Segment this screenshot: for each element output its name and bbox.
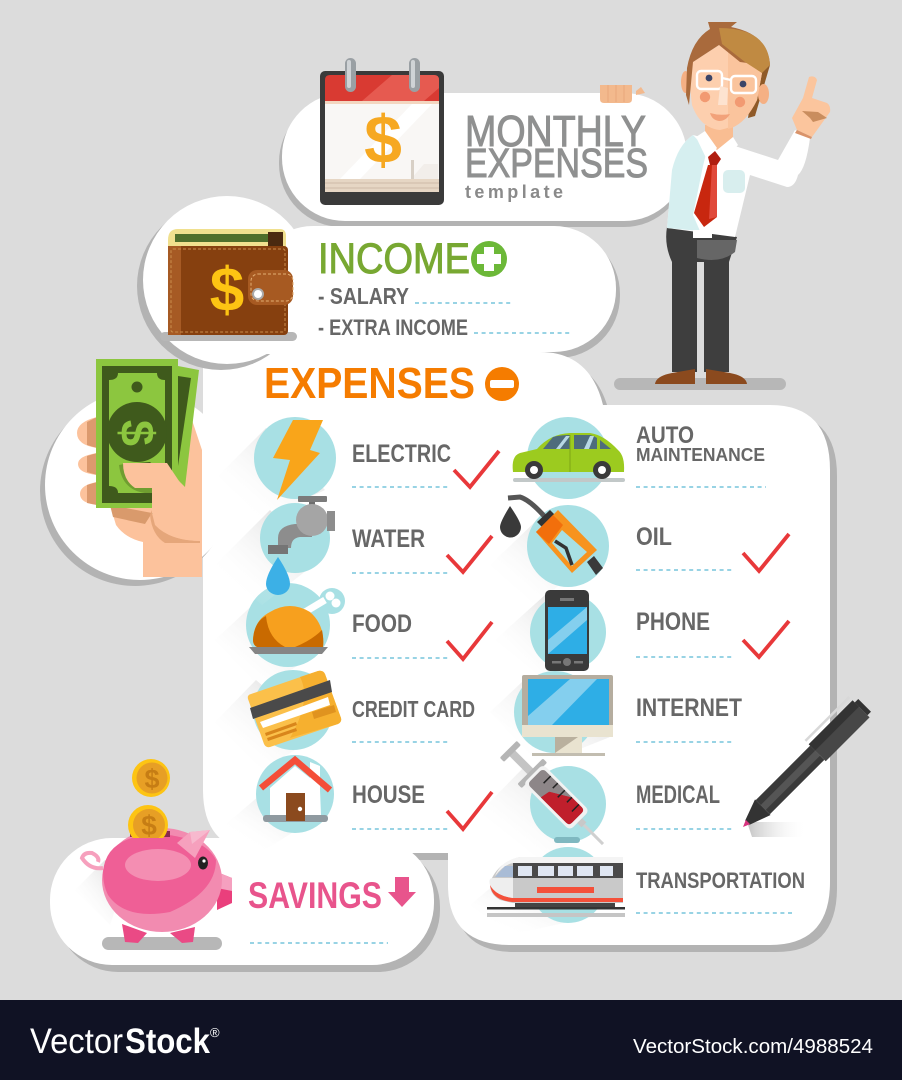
row: electric: ELECTRIC — [352, 440, 451, 468]
row: credit card: CREDIT CARD — [352, 696, 475, 722]
title — [465, 107, 648, 202]
footer bar — [0, 1000, 902, 1080]
savings heading — [248, 875, 416, 943]
income list — [318, 283, 572, 340]
row: electric — [218, 417, 499, 520]
icon: piggy bank with coins — [75, 759, 232, 950]
footer bar: ® — [210, 1025, 220, 1040]
panel: hand circle — [40, 390, 235, 586]
footer bar: Stock — [125, 1022, 210, 1061]
row: water — [215, 496, 492, 605]
panel: income pill shadow — [255, 232, 620, 358]
icon: businessman — [600, 22, 830, 390]
footer bar: VectorStock.com/4988524 — [633, 1036, 873, 1058]
panel: title pill — [279, 93, 687, 227]
row: auto maintenance: AUTO — [636, 422, 694, 449]
title: template — [465, 182, 563, 202]
title: EXPENSES — [465, 140, 648, 186]
row: internet — [490, 671, 742, 765]
row: food — [215, 583, 492, 690]
row: auto maintenance — [513, 417, 766, 499]
row: auto maintenance: MAINTENANCE — [636, 445, 765, 465]
footer bar: Vector — [30, 1022, 123, 1061]
icon: piggy bank with coins: $ — [141, 810, 157, 841]
icon: wallet — [160, 229, 297, 341]
icon: wallet: $ — [210, 256, 244, 325]
row: phone: PHONE — [636, 608, 710, 636]
row: oil — [490, 497, 789, 605]
icon: calendar: $ — [364, 102, 402, 178]
icon: piggy bank with coins: $ — [144, 764, 160, 794]
icon: hand with money — [77, 359, 202, 577]
row: house: HOUSE — [352, 781, 425, 809]
row: house — [225, 755, 492, 850]
icon: pen — [730, 693, 873, 837]
savings heading: SAVINGS — [248, 875, 382, 916]
income heading: INCOME — [318, 235, 470, 283]
row: medical — [480, 737, 732, 860]
panel: savings pill — [50, 838, 440, 972]
row: food: FOOD — [352, 610, 412, 638]
row: transportation: TRANSPORTATION — [636, 868, 805, 893]
income list: - SALARY — [318, 283, 409, 309]
row: credit card — [215, 670, 475, 770]
icon: hand with money: $ — [111, 420, 164, 446]
panel: income pill with wallet circle — [137, 196, 616, 370]
row: internet: INTERNET — [636, 694, 742, 722]
row: phone — [495, 590, 789, 680]
panel: expenses main card — [203, 352, 837, 952]
row: transportation — [470, 847, 805, 935]
row: medical: MEDICAL — [636, 781, 720, 809]
income list: - EXTRA INCOME — [318, 315, 468, 340]
title: MONTHLY — [465, 107, 646, 156]
expenses heading: EXPENSES — [264, 359, 475, 408]
icon: calendar — [320, 58, 444, 205]
row: water: WATER — [352, 525, 425, 553]
row: oil: OIL — [636, 523, 672, 551]
